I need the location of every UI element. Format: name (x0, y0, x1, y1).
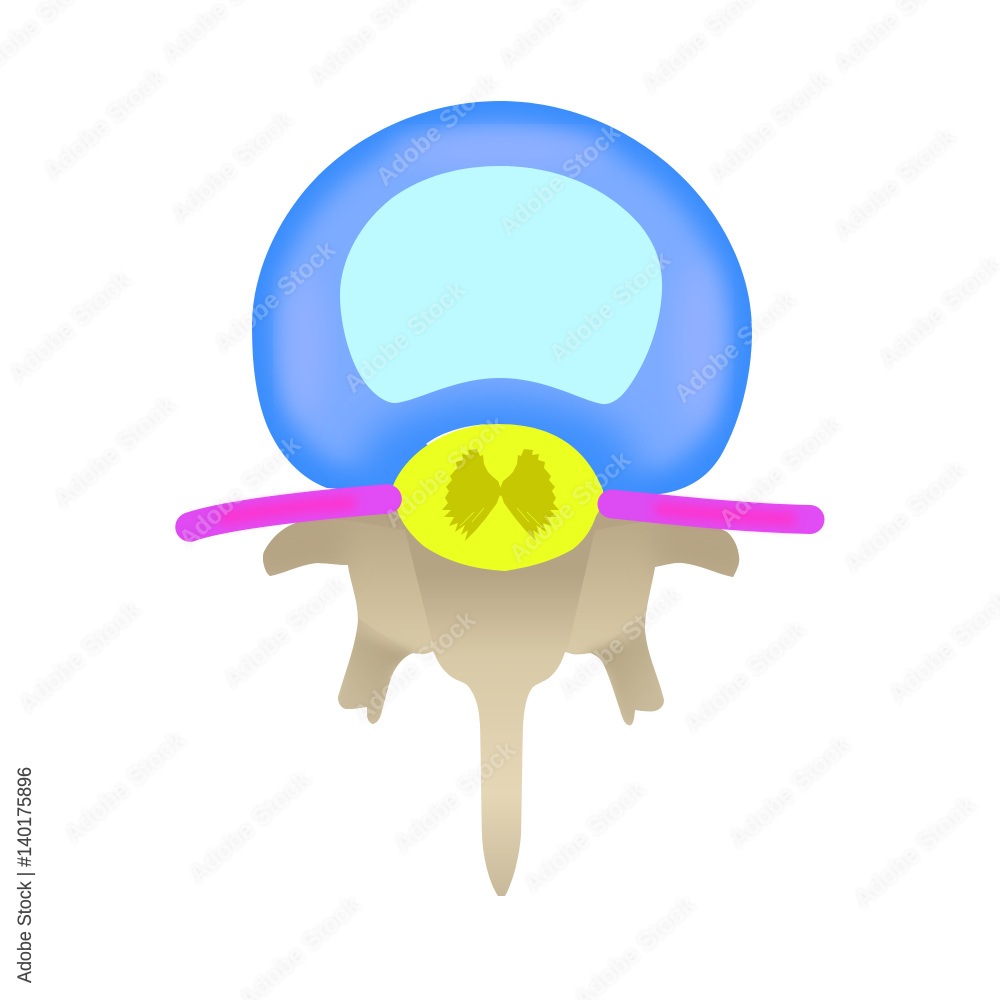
top highlight (390, 134, 610, 166)
right lamina (573, 529, 740, 654)
dark blue around cord (342, 378, 655, 484)
watermarks: Adobe Stock (704, 65, 836, 189)
watermarks: Adobe Stock (829, 122, 961, 246)
left lamina (263, 522, 434, 654)
watermarks: Adobe Stock (714, 410, 846, 534)
watermarks: Adobe Stock (504, 445, 636, 569)
watermarks: Adobe Stock (59, 725, 191, 849)
left inferior process (338, 626, 418, 724)
watermarks: Adobe Stock (371, 68, 503, 192)
white highlight (426, 424, 487, 446)
watermarks: Adobe Stock (519, 775, 651, 899)
bone: vertebral arch and processes (250, 500, 750, 900)
watermarks: Adobe Stock (209, 235, 341, 359)
intervertebral disc: annulus (252, 101, 752, 494)
watermarks: Adobe Stock (174, 430, 306, 554)
watermarks: Adobe Stock (389, 735, 521, 859)
grey matter butterfly (442, 449, 559, 541)
soft inner glow (274, 123, 729, 478)
watermarks: Adobe Stock (349, 605, 481, 729)
watermarks: Adobe Stock (544, 245, 676, 369)
right wing (498, 449, 559, 541)
watermarks: Adobe Stock (554, 580, 686, 704)
right transverse process shading (662, 530, 740, 577)
left transverse process shading (263, 523, 338, 576)
right highlight (676, 260, 720, 430)
yellow cord body (393, 424, 603, 571)
stock id side label: Adobe Stock | #140175896 (15, 767, 36, 983)
watermarks: Adobe Stock (166, 105, 298, 229)
watermarks: Adobe Stock (839, 455, 971, 579)
intervertebral disc: nucleus pulposus (340, 166, 662, 404)
watermarks: Adobe Stock (724, 730, 856, 854)
watermarks: Adobe Stock (219, 570, 351, 694)
watermarks: Adobe Stock (39, 62, 171, 186)
watermarks: Adobe Stock (184, 765, 316, 889)
watermarks: Adobe Stock (669, 285, 801, 409)
right nerve root (612, 504, 810, 520)
spinal cord (393, 424, 603, 571)
watermarks: Adobe Stock (849, 790, 981, 914)
watermarks: Adobe Stock (339, 275, 471, 399)
left highlight (285, 270, 325, 420)
watermarks: Adobe Stock (14, 595, 146, 719)
watermarks: Adobe Stock (4, 265, 136, 389)
watermarks: Adobe Stock (494, 118, 626, 242)
watermarks: Adobe Stock (379, 410, 511, 534)
watermarks: Adobe Stock (49, 390, 181, 514)
watermarks: Adobe Stock (679, 615, 811, 739)
right inferior process (584, 630, 664, 726)
left wing (442, 449, 503, 541)
left nerve root (190, 499, 387, 527)
